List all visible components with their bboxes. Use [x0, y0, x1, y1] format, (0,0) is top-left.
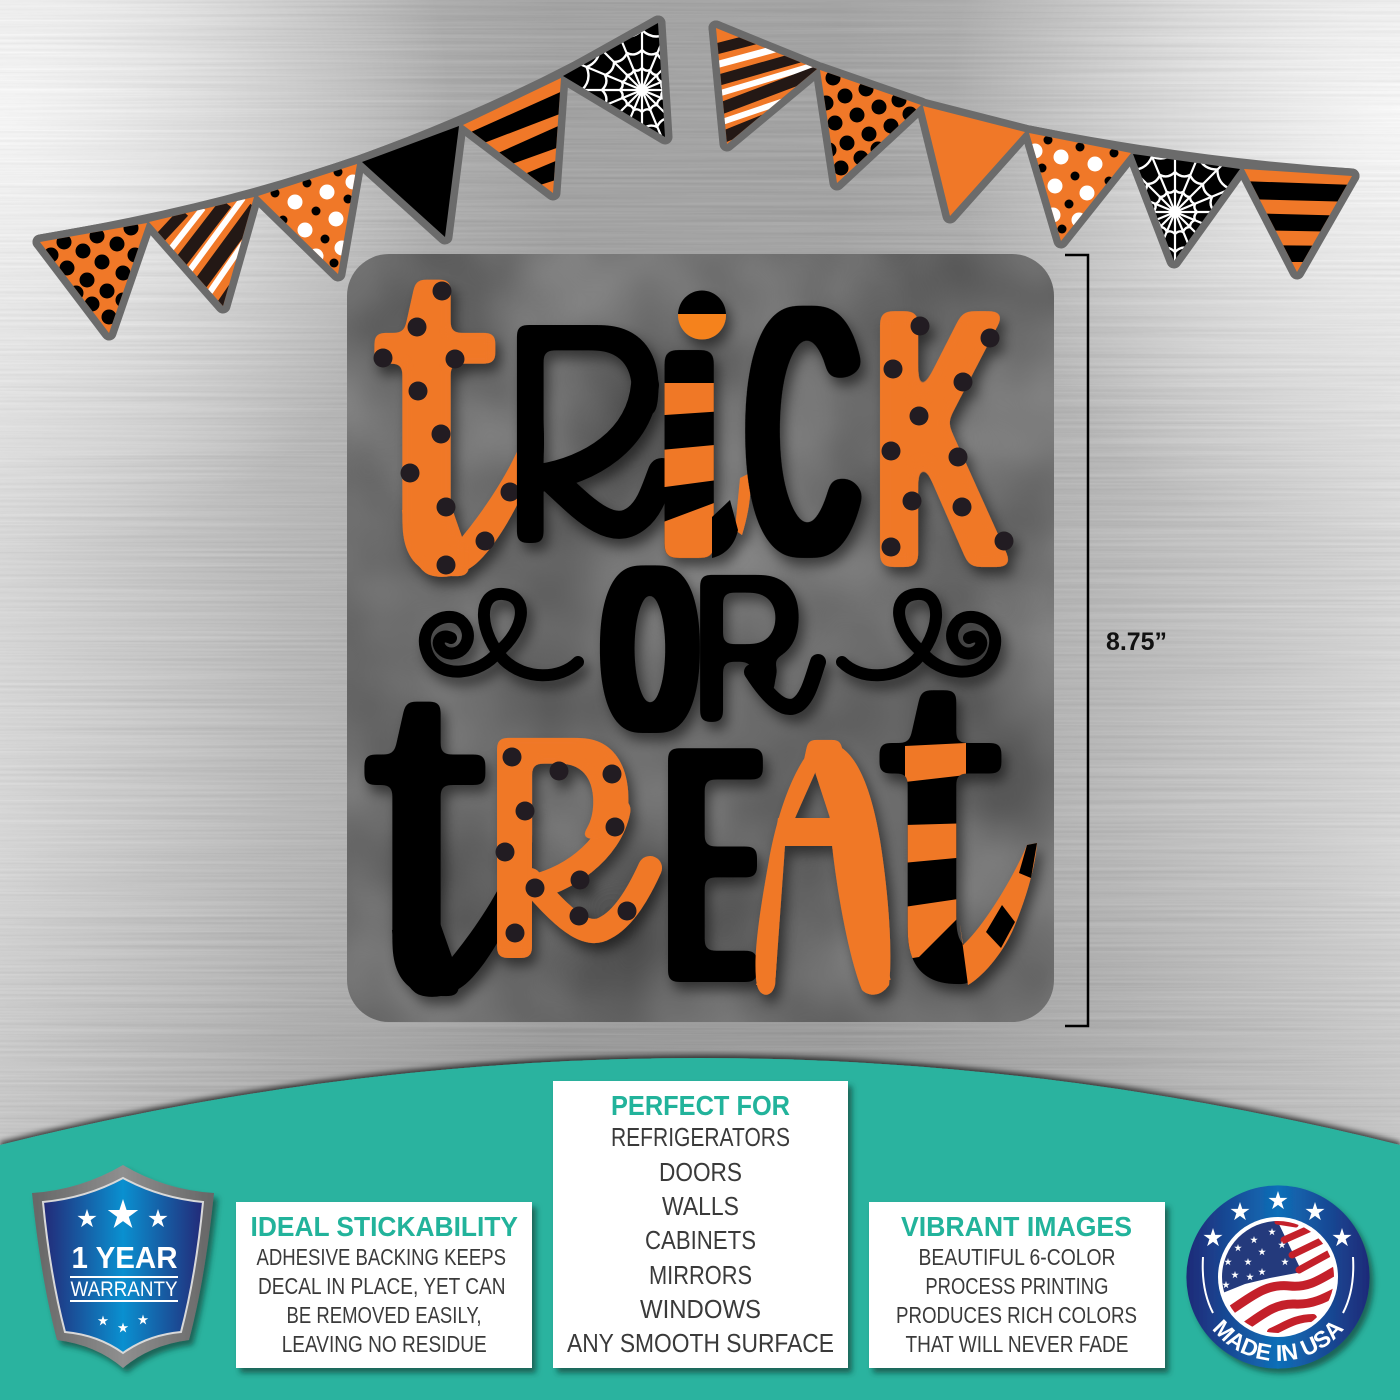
panel: perfect for: [553, 1081, 848, 1368]
heading: VIBRANT IMAGES: [901, 1211, 1132, 1242]
heading: IDEAL STICKABILITY: [250, 1211, 518, 1242]
lettering: TREAT: [364, 690, 1047, 1011]
letter i striped: [663, 290, 758, 573]
word OR: [598, 565, 836, 747]
letter C black: C: [747, 233, 859, 629]
teal footer band: [0, 1058, 1400, 1400]
letter R with polka dots: R: [488, 672, 636, 1025]
surface list: REFRIGERATORS: [611, 1122, 790, 1152]
body text: BEAUTIFUL 6-COLOR: [918, 1244, 1116, 1270]
letter i striped: ı: [643, 204, 736, 640]
flag: solid orange: [923, 106, 1025, 216]
flag: spider web: [563, 23, 665, 137]
flag: diagonal stripes: [149, 197, 254, 306]
surface list: DOORS: [659, 1157, 742, 1187]
bunting: right banner: [705, 20, 1355, 282]
flag: orange with black dots: [40, 223, 147, 333]
letter R with polka dots: [496, 738, 668, 972]
flag: orange with white and black dots: [1029, 133, 1131, 241]
body text: THAT WILL NEVER FADE: [906, 1331, 1128, 1357]
letter t with polka dots: t: [372, 165, 500, 668]
body text: LEAVING NO RESIDUE: [282, 1331, 487, 1357]
letter t black: [364, 702, 504, 1011]
dimension bracket: [1065, 255, 1088, 1026]
flag: spider web: [1133, 154, 1240, 261]
body text: [256, 1244, 506, 1357]
letter t with polka dots: [374, 280, 517, 590]
heading: PERFECT FOR: [611, 1090, 790, 1121]
badge: 1 year warranty shield: 1 YEAR: [72, 1240, 178, 1275]
swirl right: [842, 594, 995, 675]
bunting: left banner: [30, 15, 712, 340]
letter E black: E: [669, 679, 759, 1050]
surface list: MIRRORS: [649, 1260, 752, 1290]
letter K with polka dots: K: [874, 232, 1004, 645]
word OR: R: [691, 529, 807, 766]
surface list: WALLS: [662, 1191, 739, 1221]
body text: DECAL IN PLACE, YET CAN: [258, 1273, 506, 1299]
body text: PRODUCES RICH COLORS: [896, 1302, 1137, 1328]
body text: [896, 1244, 1137, 1357]
letter R black: [516, 325, 665, 556]
swirl left: [425, 594, 578, 675]
ring stars: [1203, 1191, 1352, 1246]
lettering: TRICK: [374, 280, 1023, 590]
letter t black: t: [362, 587, 490, 1086]
panel: vibrant images: [869, 1202, 1165, 1368]
flag: orange with white and black dots: [258, 164, 357, 274]
word OR: O: [607, 521, 693, 778]
badge text: MADE IN USA: [1212, 1319, 1344, 1361]
lettering: OR with swirls: [418, 565, 1012, 747]
letter R black: R: [499, 259, 674, 609]
badge: 1 year warranty shield: WARRANTY: [70, 1278, 178, 1301]
body text: ADHESIVE BACKING KEEPS: [256, 1244, 506, 1270]
side arcs: [1203, 1257, 1353, 1313]
flag: orange with black dots: [820, 70, 921, 183]
badge: 1 year warranty shield: [32, 1165, 214, 1368]
surface list: WINDOWS: [640, 1294, 761, 1324]
flag: [1215, 1220, 1340, 1332]
surface list: ANY SMOOTH SURFACE: [567, 1328, 834, 1358]
dimension label: 8.75”: [1106, 628, 1167, 656]
panel: ideal stickability: [236, 1202, 532, 1368]
body text: BE REMOVED EASILY,: [286, 1302, 482, 1328]
flag: stripes with white: [716, 28, 817, 144]
flag: horizontal stripes: [1244, 169, 1352, 272]
flag: orange and black stripes: [463, 78, 561, 193]
flag: solid black: [362, 126, 459, 237]
surface list: CABINETS: [645, 1225, 756, 1255]
surface list: [567, 1122, 834, 1358]
body text: PROCESS PRINTING: [925, 1273, 1108, 1299]
badge: made in USA: [1186, 1185, 1378, 1378]
letter t striped: t: [876, 577, 1006, 1075]
decal panel: dark mottled background: [347, 254, 1054, 1022]
letter A orange: A: [760, 663, 888, 1071]
